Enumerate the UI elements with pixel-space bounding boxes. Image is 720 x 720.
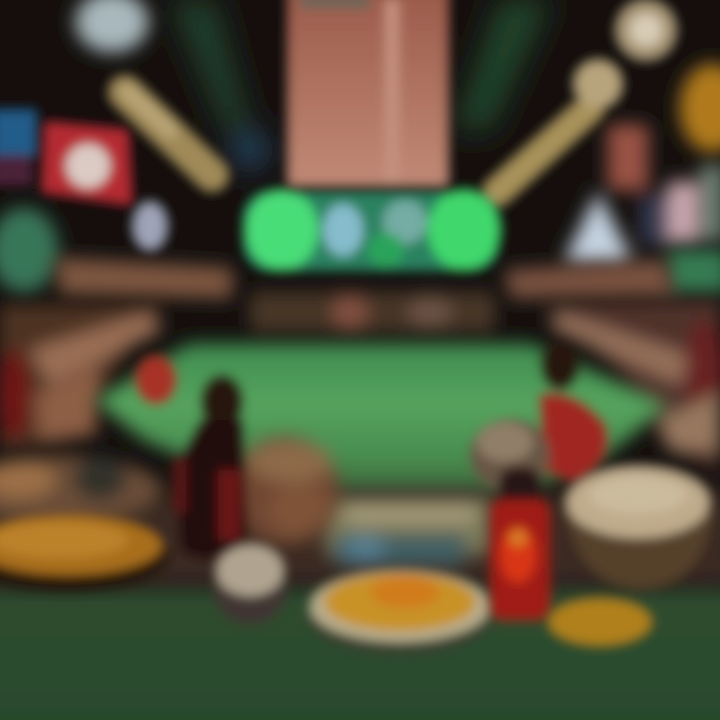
white ball on floor: [214, 544, 286, 624]
green right panel: [668, 250, 720, 292]
green left panel: [0, 208, 58, 292]
stands upper right: [505, 260, 675, 298]
white light top left: [76, 0, 148, 52]
person on right: [470, 341, 607, 491]
red bottle: [490, 468, 550, 620]
lower ground band: [0, 490, 720, 590]
right bat: [497, 60, 622, 192]
red ball: [136, 356, 176, 404]
orange snack patch: [548, 598, 652, 646]
stands centre: [250, 292, 495, 332]
curtain banner: [288, 0, 448, 186]
dark bottle left: [174, 376, 246, 558]
brown food mound: [231, 436, 339, 544]
floor: [0, 590, 720, 720]
flags right: [564, 125, 720, 262]
flags left: [0, 110, 167, 250]
stands lower left: [0, 305, 165, 450]
white ball top right: [616, 0, 676, 60]
left snacks tray: [0, 456, 160, 524]
stands upper left: [55, 258, 232, 298]
green scoreboard: [244, 190, 500, 270]
centre plate of nachos: [308, 570, 492, 656]
left plate of food: [0, 515, 168, 592]
stands lower right: [540, 300, 720, 470]
right bowl: [565, 466, 712, 590]
dark green upper streaks: [170, 0, 550, 170]
orange flag top right: [680, 64, 720, 152]
green pitch: [95, 344, 668, 495]
table: [325, 498, 490, 565]
left bat: [125, 92, 212, 175]
